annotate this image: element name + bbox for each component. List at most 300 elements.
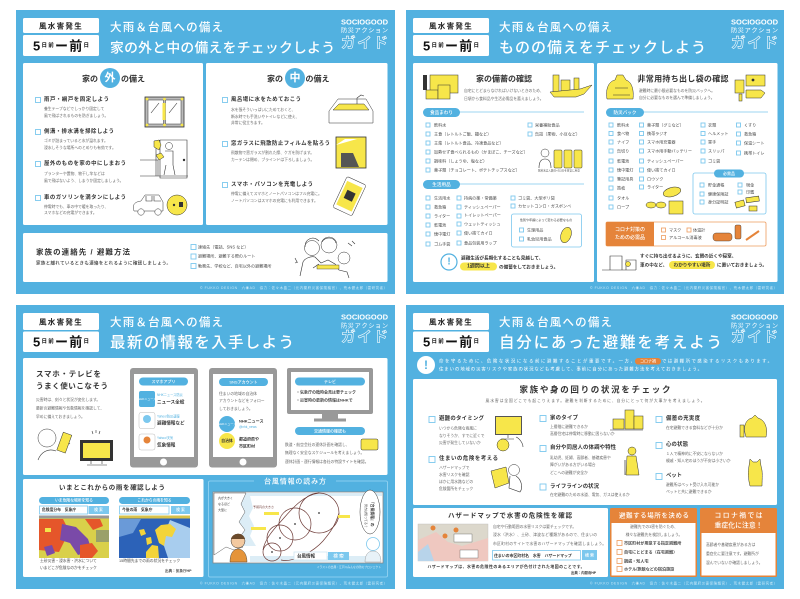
check item [36,193,126,215]
television: テレビ [324,378,336,384]
checklist: emergency pack: 使い捨てカイロ [647,166,676,172]
tablet: SNS [209,368,277,468]
title: 大雨＆台風への備え [110,315,223,329]
checklist [191,244,271,268]
logo: 防災アクション [341,322,388,330]
checklist: daily goods: ゴミ袋、大型ポリ袋 [518,194,555,200]
panel: emergency bag: 避難時に最小限必要なものを防災バックへ。 [639,88,715,93]
checklist: emergency pack: スマホ用手動バッテリー [647,148,692,154]
search: forecast rain: 今後の雨 気象庁 [122,507,153,512]
title: 自分にあった避難を考えよう [499,334,722,352]
checklist: daily goods: カセットコンロ・ガスボンベ [518,202,571,208]
search: danger map: いま危険な場所を知る [55,498,93,502]
icon: monitor [496,416,523,451]
check item: 高層住宅は停電時に移動に困らないか [550,431,615,436]
box: corona items: ための必需品 [615,234,645,241]
checklist: emergency pack: 筆記用具 [617,176,633,182]
check item: 避難のタイミング [439,414,485,422]
panel: smartphone and TV [23,358,388,475]
check item: １人で精神的に不安にならないか [666,451,723,456]
panel: family situation check: 風水害は全国どこでも起こりえます。避難を判断するために、自分にとって何が大事かを考えましょう。 [486,398,704,403]
intro notice: 命を守るために、危険な状況になる前に避難することが重要です。一方、 [439,358,635,364]
check item: 飛散物で窓ガラスが割れた際、ケガを防げます。 [231,150,314,155]
check item: 停電に備えてスマホとノートパソコンはフル充電に。 [231,191,322,196]
checklist: emergency pack: ロープ [617,204,630,210]
check item: 心の状態 [666,440,689,448]
map: hazard [418,524,488,561]
panel: emergency bag [597,63,778,282]
check item: 親戚・知人宅のほうが不安は小さいか [666,458,731,463]
comic [213,490,383,563]
transport info: 交通情報の確認も [314,428,346,434]
account: NHK: @nhk_news [239,425,257,429]
notice: storage location: 車の中など、 [640,262,667,268]
check item [656,414,723,430]
pill: emergency pack [606,108,768,117]
checklist: emergency pack: 懐中電灯 [617,166,633,172]
check item: 水を張そういっぱいにためておくと、 [231,107,295,112]
checklist: 親戚・知人宅 [624,558,649,564]
app: Yahoo weather [139,434,176,450]
box: valuables [693,170,766,214]
box: gender and age items: 性別や年齢によって変わる必要なもの [520,217,572,222]
checklist: daily goods: 使い捨てカイロ [464,230,493,236]
icon: elderly person [625,447,639,475]
check item [540,482,630,497]
checklist: daily goods: 持病の薬・常備薬 [464,194,497,200]
check item: 風で飛ばないよう、しまうか固定しましょう。 [44,178,123,183]
tablet: apps [130,368,198,468]
transport info: 無理なく安全なスケジュールを考えましょう。 [285,450,364,455]
app: Yahoo disaster [139,412,185,428]
check item: カーテンは閉め、ブラインドは下ろしましょう。 [231,157,314,162]
checklist: daily goods: ライター [434,212,450,218]
credit: © FUKKO DESIGN 六◉AD 協力：佐々木晶二（元内閣府災害保険議官）、荒木健太郎（雲研究者） [590,285,777,290]
check item [36,95,109,118]
panel: decide evacuation place [610,508,697,577]
pill: daily goods: 生活用品 [432,181,451,188]
check item [222,95,301,125]
heading: うまく使いこなそう [36,380,108,390]
check item: ゴミが詰まっていると水が溢れます。 [44,138,108,143]
checklist: daily goods: ティッシュペーパー [464,204,501,210]
account: NHK: NHKニュース [239,418,263,424]
speech bubble [360,490,380,534]
icon: door and person [140,140,188,178]
checklist: 市区町村が用意する指定避難所 [624,540,681,546]
check item: 災害が発生していないか [439,440,481,445]
checklist: emergency pack: ヘルメット [708,131,728,136]
poster 3: latest information [16,305,395,589]
box: corona items [606,222,766,246]
panel: hazard map: ハザードマップで水害の危険性を確認 [448,510,572,520]
television: ・災害時の最新の情報はNHKで [296,396,353,402]
checklist: emergency pack: 食べ物 [617,130,629,136]
checklist: daily goods: 救急箱 [434,204,446,210]
checklist: food: 缶詰（果物、小豆など） [535,130,580,136]
check item: 上層階に避難できるか [550,424,588,429]
heading [36,368,108,390]
body text [493,524,606,546]
logo: SOCIOGOOD [731,18,779,26]
checklist [617,540,681,572]
check item [222,180,322,203]
annotations: 予報円の大きさ [253,504,274,509]
tablet: SNS: アカウントなどをフォロー [219,398,265,403]
phase badge [23,18,99,56]
body text: 市区町村のサイトで水害のハザードマップを確認しましょう。 [493,541,606,546]
title [499,315,722,352]
notice: one week: 1週間以上 [467,262,490,270]
map: rain forecast [119,516,190,558]
icon: radio and tools [735,75,765,101]
check item: 避難所はペット受け入れ可能か [666,482,719,487]
title: 大雨＆台風への備え [499,315,612,329]
search box: 検 索 [585,552,594,558]
logo: SOCIOGOOD [731,312,779,322]
box: corona items: アルコール消毒液 [669,234,702,240]
check item: 備蓄の充実度 [666,414,701,422]
annotations: なるほど [218,501,230,506]
intro notice: 住まいの地域の災害リスクや家族の状況なども考慮して、事前に自分にあった避難方法を考えておきましょう。 [439,366,702,372]
icon: bathtub [329,95,373,123]
notice: one week [441,254,558,270]
panel: home stockpile: 日頃から食料品や生活必需品を蓄えましょう。 [464,96,544,101]
checklist: 避難場所、避難する際のルート [198,252,255,258]
logo: ガイド [341,35,388,52]
check item: 屋外のものを家の中にしまおう [44,159,126,167]
logo: 防災アクション [731,322,778,330]
check item: 断水時でも手洗いやトイレなどに使え、 [231,114,299,119]
checklist: emergency pack: 笛枚 [617,184,625,190]
checklist: emergency pack: 救急箱 [744,130,756,136]
panel: decide evacuation place: 避難する場所を決める [619,510,689,520]
box: gender and age items: 乳幼児用食品 [527,236,552,242]
check item: 在宅避難のための水道、電気、ガスは使えるか [550,492,630,497]
notice: storage location: わかりやすい場所 [674,262,711,268]
check item: スマホ・パソコンを充電しよう [231,180,313,188]
title: 家の外と中の備えをチェックしよう [110,40,335,56]
panel: emergency bag: 非常用持ち出し袋の確認 [638,74,728,84]
panel: corona warning: 高齢者や基礎疾患がある方は [706,542,756,547]
phase badge [413,313,489,352]
panel: outside: の備え [121,74,145,84]
search: forecast rain: 検 索 [176,507,185,512]
app: NHK: ニュース全般 [157,398,185,406]
logo [731,18,779,52]
notice: one week: の備蓄をしておきましょう。 [499,264,558,270]
character: doctor [365,538,381,562]
icon: window film [336,137,366,168]
search: danger map [39,497,109,514]
box: valuables: 貯金通帳 [708,182,724,188]
panel: hazard map: ハザードマップは、水害の危険性のあるエリアが色付けされた地図のことです。 [428,564,584,569]
check item [540,414,615,436]
check item: 風で飛ばされるものを防ぎましょう。 [44,113,108,118]
transport info: 鉄道・航空会社の運休計画を確認し、 [285,442,350,447]
intro notice: ! [424,358,428,372]
checklist: emergency pack: 缶切り [617,148,629,154]
phase badge: 5日前ー前日 [423,334,479,350]
account: local government: 自治体 [221,438,233,443]
check item: 側溝・排水溝を掃除しよう [44,127,114,135]
panel: family situation check: 家族や身の回りの状況をチェック [520,384,670,394]
checklist: emergency pack: ゴミ袋 [708,158,720,164]
box: valuables: 健康保険証 [708,190,728,196]
check item: 浸水しそうな場所へのとめりも有効です。 [44,145,116,150]
box: corona items: コロナ対策の [615,226,645,233]
panel: typhoon information [208,476,388,577]
checklist: food: 主菜（レトルト食品、冷凍食品など） [434,140,504,146]
panel: outside: 家の [82,74,98,84]
caption: 土砂災害・浸水害・洪水について [40,558,97,563]
check item: 雨戸・網戸を固定しよう [44,95,109,103]
checklist: emergency pack: ナイフ [617,138,629,144]
check item: 車のガソリンを満タンにしよう [44,193,126,201]
title: 大雨＆台風への備え [499,20,612,34]
comic source: イラストの出典：江戸川みんなの防災プロジェクト [317,565,381,569]
app: Yahoo weather: 気象情報 [157,442,176,448]
check item: スマホなどの充電ができます。 [44,210,97,215]
check item: 障がいがある方がいる場合 [550,462,596,467]
title: ものの備えをチェックしよう [499,40,706,56]
logo: 防災アクション [341,26,388,34]
panel: typhoon information: 台風情報の読み方 [264,476,326,486]
check item: 在宅避難できる食料などが十分か [666,425,723,430]
checklist: 勤務先、学校など、自宅以外の避難場所 [198,262,271,268]
checklist: daily goods: 懐中電灯 [434,230,450,236]
tablet: SNS: しておきましょう。 [219,406,253,411]
checklist: daily goods: ウェットティッシュ [464,220,501,226]
check item: ハザードマップで [439,465,470,470]
check item: いつから危険な雨風に [439,426,477,430]
box: valuables: 印鑑 [746,188,754,194]
panel: home stockpile: 自宅にとどまらなければいけないときのため、 [464,88,544,93]
check item [429,414,485,445]
search box [492,550,597,560]
body text: 自宅や行動範囲の水害リスクは要チェックです。 [493,524,576,529]
phase badge: 風水害発生 [39,20,83,30]
panel: inside: 家の [267,74,283,84]
check item: 住まいの危険を考える [439,454,498,462]
checklist: 連絡先（電話、SNS など） [198,244,248,250]
checklist: emergency pack: タオル [617,194,629,200]
checklist: emergency pack: 携帯ラジオ [647,130,667,136]
check item: どこへの避難が安全か [550,470,588,475]
panel: family contacts [23,233,388,282]
panel: corona warning: コロナ禍では [714,510,763,520]
illustration: family [295,237,355,278]
search box: 住まいの市区町村名 水害 ハザードマップ [494,553,572,558]
checklist: emergency pack: ロウソク [647,176,663,182]
icon: TV alert [80,430,113,465]
check item: 水害リスクを確認 [439,472,470,477]
app: Yahoo weather: Yahoo!天気 [157,435,174,440]
intro notice: コロナ禍 [640,358,656,364]
intro notice [417,356,772,374]
check item: ほかに用水路などの [439,479,473,484]
typhoon forecast circles [263,493,339,561]
icon: buildings [610,410,643,430]
checklist: emergency pack: 軍手 [708,138,716,144]
caption: いまどこが危険なのかをチェック [40,565,97,570]
app: NHK [138,391,185,407]
speech bubble: 見方は知ってる？ [364,504,369,528]
checklist: 自宅にとどまる（在宅避難） [624,548,677,554]
panel: inside [206,63,388,225]
phase badge: 5日前ー前日 [33,38,89,54]
account: local government [219,433,259,449]
search box: 検 索 [333,552,344,560]
check item: ペット [666,472,682,479]
icon: person with water bottles: 飲料水は人数分×3日分を目安に用意 [538,168,580,172]
body text [36,397,104,419]
notice: storage location: すぐに持ち出せるように、玄関の近くや寝室、 [640,252,736,260]
panel: decide evacuation place: 様々な避難先を検討しましょう。 [626,532,682,537]
credit: © FUKKO DESIGN 六◉AD 協力：佐々木晶二（元内閣府災害保険議官）、荒木健太郎（雲研究者） [200,285,387,290]
icon: reading hazard map [491,464,522,492]
check item: なりそうか、すでに近くで [439,433,485,438]
check item: 危険箇所をチェック [439,486,473,491]
checklist: emergency pack: スリッパ [708,148,724,154]
check item: 乳幼児、妊婦、高齢者、基礎疾患や [550,455,611,460]
icon: food stock [423,75,458,99]
icon: fuel gauge [167,195,187,215]
notice: one week: 避難生活が長期化することも見越して、 [461,254,543,262]
logo: SOCIOGOOD [341,18,389,26]
check item: ペットと共に避難できるか [666,489,712,494]
check item: プランターや置物、物干し竿などは [44,171,105,176]
checklist: daily goods: ゴム手袋 [434,240,450,246]
check item: 養生テープなどでしっかり固定して [44,106,105,111]
account: local government: 市区町村 [239,442,255,448]
box: valuables: 身分証明証 [708,198,728,204]
checklist: emergency pack: 菓子類（グミなど） [647,122,684,128]
credit: © FUKKO DESIGN 六◉AD 協力：佐々木晶二（元内閣府災害保険議官）、荒木健太郎（雲研究者） [590,580,777,586]
annotations: 大型に [218,507,227,512]
poster 1: outer and inside preparation [16,10,395,294]
transport info [285,427,378,464]
caption [40,558,97,570]
panel: family situation check [413,379,777,505]
checklist: ホテル/旅館などの宿泊施設 [624,566,674,572]
icon: backpack [740,415,767,437]
panel: inside: の備え [306,74,330,84]
check item [540,443,617,475]
check item: 非常に役立ちます。 [231,120,265,125]
check item: 風呂場に水をためておこう [231,95,301,103]
poster 2: supplies [406,10,784,294]
source: 出典：気象庁HP [165,568,192,573]
poster 4: evacuation planning [406,305,784,589]
pill: emergency pack: 防災バック [614,109,637,116]
heading: スマホ・テレビを [36,368,101,378]
checklist: emergency pack: 衣類 [708,122,716,128]
icon: person with water bottles [538,149,582,172]
check item [656,472,719,494]
panel: outside [23,63,203,225]
panel: family contacts: 家族の連絡先 / 避難方法 [36,246,130,256]
panel: hazard map: 出典：内閣府HP [571,570,597,575]
notice: storage location: に置いておきましょう。 [717,262,767,268]
tablet: apps: スマホアプリ [152,378,175,384]
checklist: emergency pack: スマホ用充電器 [647,140,676,144]
annotations [218,495,350,530]
title [499,20,706,56]
panel: rain check: いまとこれからの雨を確認しよう [59,482,165,492]
checklist: food: 主食（レトルトご飯、麺など） [434,130,491,136]
logo [341,312,389,346]
checklist: emergency pack: 飲料水 [617,122,629,128]
body text: 最新の避難情報や気象情報を確認して、 [36,406,104,410]
notice: storage location [602,252,767,270]
logo [731,312,779,346]
check item: 停電時でも、車の中で暖を取ったり、 [44,204,108,209]
app: Yahoo disaster: 避難情報など [157,420,185,426]
panel: home stockpile [413,63,594,282]
search: forecast rain: これからの雨を知る [137,498,172,502]
credit: © FUKKO DESIGN 六◉AD 協力：佐々木晶二（元内閣府災害保険議官）、荒木健太郎（雲研究者） [200,580,387,586]
app: Yahoo disaster: Yahoo!防災速報 [157,414,180,418]
title [110,315,294,352]
check item: 家のタイプ [550,414,579,422]
box: corona items: マスク [669,226,681,232]
phase badge: 風水害発生 [39,316,83,326]
checklist: daily goods [426,194,571,246]
icon: backpack [607,75,633,99]
search box [294,552,349,560]
account: local government: 都道府県や [239,436,259,442]
panel: rain check: 15時間先までの雨の状況をチェック [119,558,180,563]
phase badge: 5日前ー前日 [423,38,479,54]
notice: one week: ! [447,256,451,268]
checklist: emergency pack: 保温シート [744,140,764,146]
search: danger map: 検 索 [94,507,103,512]
box: valuables: 現金 [746,182,754,188]
search: danger map: 危険度分布 気象庁 [42,507,76,512]
check item: 窓ガラスに飛散防止フィルムを貼ろう [231,139,330,147]
search box: 台風情報 [297,552,315,560]
check item: ノートパソコンはスマホの充電にも利用できます。 [231,198,318,203]
body text: 災害時は、刻々と状況が変化します。 [36,397,100,402]
icon: cat [748,459,762,486]
account: NHK: NHKニュース [218,421,236,426]
panel: home stockpile: 家の備蓄の確認 [476,74,532,84]
icon: person with phone [38,429,72,460]
checklist: food: 菓子類（チョコレート、ポテトチップスなど） [434,166,520,172]
box: corona items: 体温計 [693,226,705,232]
icon: car [133,195,163,215]
panel: hazard map [413,508,608,577]
logo [341,18,389,52]
title [110,20,335,56]
check item [36,127,116,150]
checklist: food [426,122,580,172]
logo: 防災アクション [731,26,778,34]
icon: window [145,97,184,127]
panel: inside: 中 [290,70,300,84]
checklist: daily goods: トイレットペーパー [464,212,501,218]
checklist: emergency pack: くすり [744,122,756,128]
panel: corona warning: 重症化に要注意です。避難所が [706,551,759,556]
checklist: emergency pack [609,122,764,210]
character: child [230,534,247,562]
panel: outside: 外 [104,70,116,84]
checklist: food: 栄養補助食品 [535,122,560,128]
phase badge: 5日前ー前日 [33,334,89,350]
tablet: SNS: 住まいの地域の自治体 [219,391,257,396]
logo: SOCIOGOOD [341,312,389,322]
